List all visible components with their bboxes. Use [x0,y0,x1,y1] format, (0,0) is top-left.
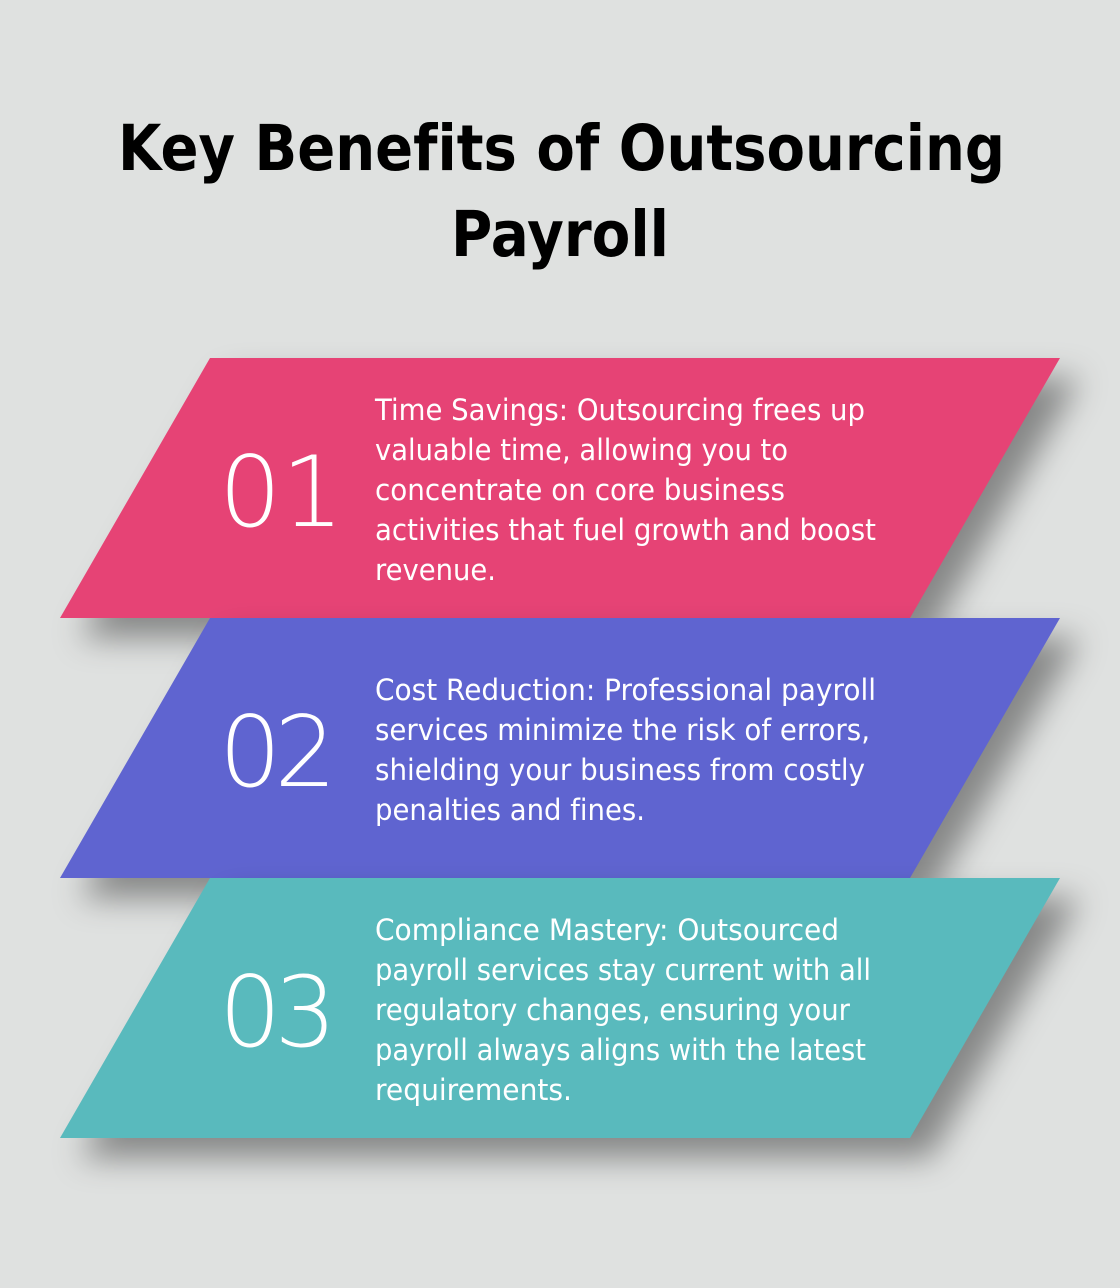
number 02: 02 [219,696,330,810]
text: cost reduction: Cost Reduction: Professional payroll [375,673,876,707]
text: compliance mastery: payroll always aligns with the latest [375,1033,866,1067]
panel: time savings [60,358,1080,638]
text: cost reduction: penalties and fines. [375,793,645,827]
title: Payroll [451,198,669,271]
text: compliance mastery [375,913,871,1107]
text: cost reduction: shielding your business from costly [375,753,865,787]
title: Key Benefits of Outsourcing [118,112,1005,185]
text: time savings [374,393,876,587]
text: compliance mastery: regulatory changes, ensuring your [375,993,850,1027]
text: cost reduction: services minimize the risk of errors, [375,713,870,747]
text: time savings: valuable time, allowing you to [375,433,788,467]
text: time savings: revenue. [375,553,496,587]
text: time savings: activities that fuel growth and boost [375,513,876,547]
text: compliance mastery: requirements. [375,1073,572,1107]
text: compliance mastery: Compliance Mastery: Outsourced [375,913,839,947]
number 01: 01 [219,436,344,550]
text: cost reduction [375,673,876,827]
text: compliance mastery: payroll services stay current with all [375,953,871,987]
panel: cost reduction [60,618,1080,898]
text: time savings: Time Savings: Outsourcing frees up [374,393,865,427]
panel: compliance mastery [60,878,1080,1158]
text: time savings: concentrate on core business [375,473,785,507]
title [118,112,1005,271]
number 03: 03 [219,956,330,1070]
